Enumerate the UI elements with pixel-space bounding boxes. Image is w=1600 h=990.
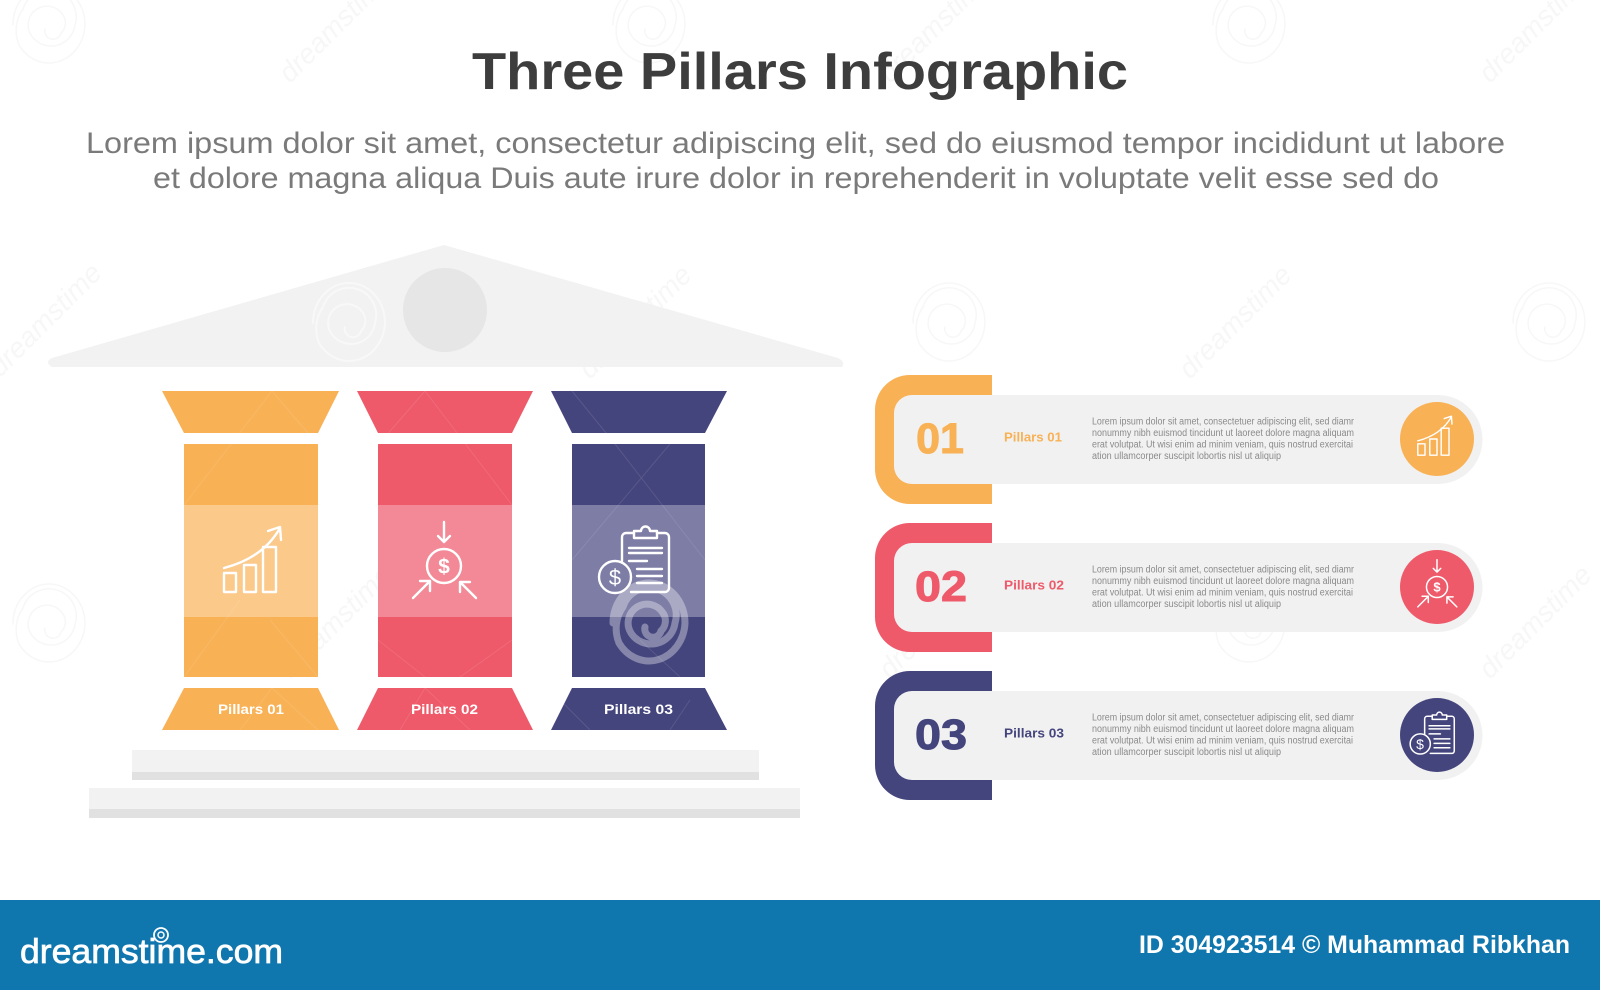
item 01 body text: nonummy nibh euismod tincidunt ut laoreet dolore magna aliquam <box>1092 428 1354 439</box>
pillar 2 label: Pillars 02 <box>411 702 478 717</box>
watermark pattern <box>0 0 1598 684</box>
pillar 3 <box>551 391 727 730</box>
item 01 bar <box>894 395 1482 484</box>
icon: money inflow: $ <box>438 556 450 578</box>
icon: money inflow <box>413 522 476 598</box>
icon: money inflow badge <box>1400 550 1474 624</box>
item 01 heading: Pillars 01 <box>1004 430 1062 444</box>
icon: clipboard badge <box>1400 698 1474 772</box>
item 01 number: 01 <box>916 415 964 463</box>
icon: clipboard badge: $ <box>1416 736 1424 752</box>
footer logo: dreamstime.com <box>20 933 283 971</box>
watermark pattern: dreamstime <box>272 559 398 684</box>
item 03 body text: ation ullamcorper suscipit lobortis nisl ut aliquip <box>1092 747 1281 758</box>
item 02 bar <box>894 543 1482 632</box>
subtitle text: et dolore magna aliqua Duis aute irure dolor in reprehenderit in voluptate velit esse sed do <box>153 162 1439 195</box>
subtitle text: Lorem ipsum dolor sit amet, consectetur adipiscing elit, sed do eiusmod tempor incididunt ut labore <box>86 127 1505 160</box>
watermark pattern: dreamstime <box>1472 559 1598 684</box>
watermark pattern: dreamstime <box>1172 259 1298 384</box>
icon: money inflow badge: $ <box>1433 580 1441 594</box>
title: Three Pillars Infographic <box>472 43 1128 101</box>
item 02 body text: ation ullamcorper suscipit lobortis nisl ut aliquip <box>1092 599 1281 610</box>
item 03 bar <box>894 691 1482 780</box>
icon: clipboard and coin: $ <box>609 565 621 590</box>
item 01 body text <box>1092 416 1355 462</box>
item 02 body text: erat volutpat. Ut wisi enim ad minim veniam, quis nostrud exercitai <box>1092 588 1353 598</box>
item 02 body text <box>1092 564 1355 610</box>
pillar 2 <box>357 391 533 730</box>
panel: item 01 <box>875 375 1482 504</box>
temple roof <box>48 245 843 367</box>
item 03 body text: nonummy nibh euismod tincidunt ut laoreet dolore magna aliquam <box>1092 724 1354 735</box>
watermark pattern: dreamstime <box>872 559 998 684</box>
temple upper step <box>132 750 759 780</box>
item 03 body text <box>1092 712 1355 758</box>
item 03 heading: Pillars 03 <box>1004 726 1064 740</box>
temple lower step <box>89 788 800 818</box>
icon: growth chart badge <box>1400 402 1474 476</box>
watermark pattern: dreamstime <box>572 259 698 384</box>
pillar 1 <box>162 391 339 730</box>
item 01 body text: ation ullamcorper suscipit lobortis nisl ut aliquip <box>1092 451 1281 462</box>
watermark overlay on pillars <box>184 391 705 730</box>
item 03 body text: Lorem ipsum dolor sit amet, consectetuer adipiscing elit, sed diamr <box>1092 712 1355 724</box>
item 02 number: 02 <box>915 563 967 611</box>
panel: item 02 <box>875 523 1482 652</box>
pillar 3 label: Pillars 03 <box>604 702 674 717</box>
item 01 body text: Lorem ipsum dolor sit amet, consectetuer adipiscing elit, sed diamr <box>1092 416 1355 428</box>
icon: clipboard and coin <box>599 526 669 593</box>
item 03 number: 03 <box>915 711 967 759</box>
pillar 1 label: Pillars 01 <box>218 702 285 717</box>
item 01 bracket <box>875 375 992 504</box>
panel: item 03 <box>875 671 1482 800</box>
item 02 heading: Pillars 02 <box>1004 578 1064 592</box>
item 03 bracket <box>875 671 992 800</box>
item 03 body text: erat volutpat. Ut wisi enim ad minim veniam, quis nostrud exercitai <box>1092 736 1353 746</box>
item 02 bracket <box>875 523 992 652</box>
panel: temple illustration <box>48 245 843 818</box>
item 02 body text: Lorem ipsum dolor sit amet, consectetuer adipiscing elit, sed diamr <box>1092 564 1355 576</box>
subtitle text <box>86 127 1505 195</box>
footer banner <box>0 900 1600 990</box>
footer credit: ID 304923514 © Muhammad Ribkhan <box>1139 931 1570 959</box>
icon: growth chart <box>224 527 281 592</box>
item 02 body text: nonummy nibh euismod tincidunt ut laoreet dolore magna aliquam <box>1092 576 1354 587</box>
item 01 body text: erat volutpat. Ut wisi enim ad minim veniam, quis nostrud exercitai <box>1092 440 1353 450</box>
